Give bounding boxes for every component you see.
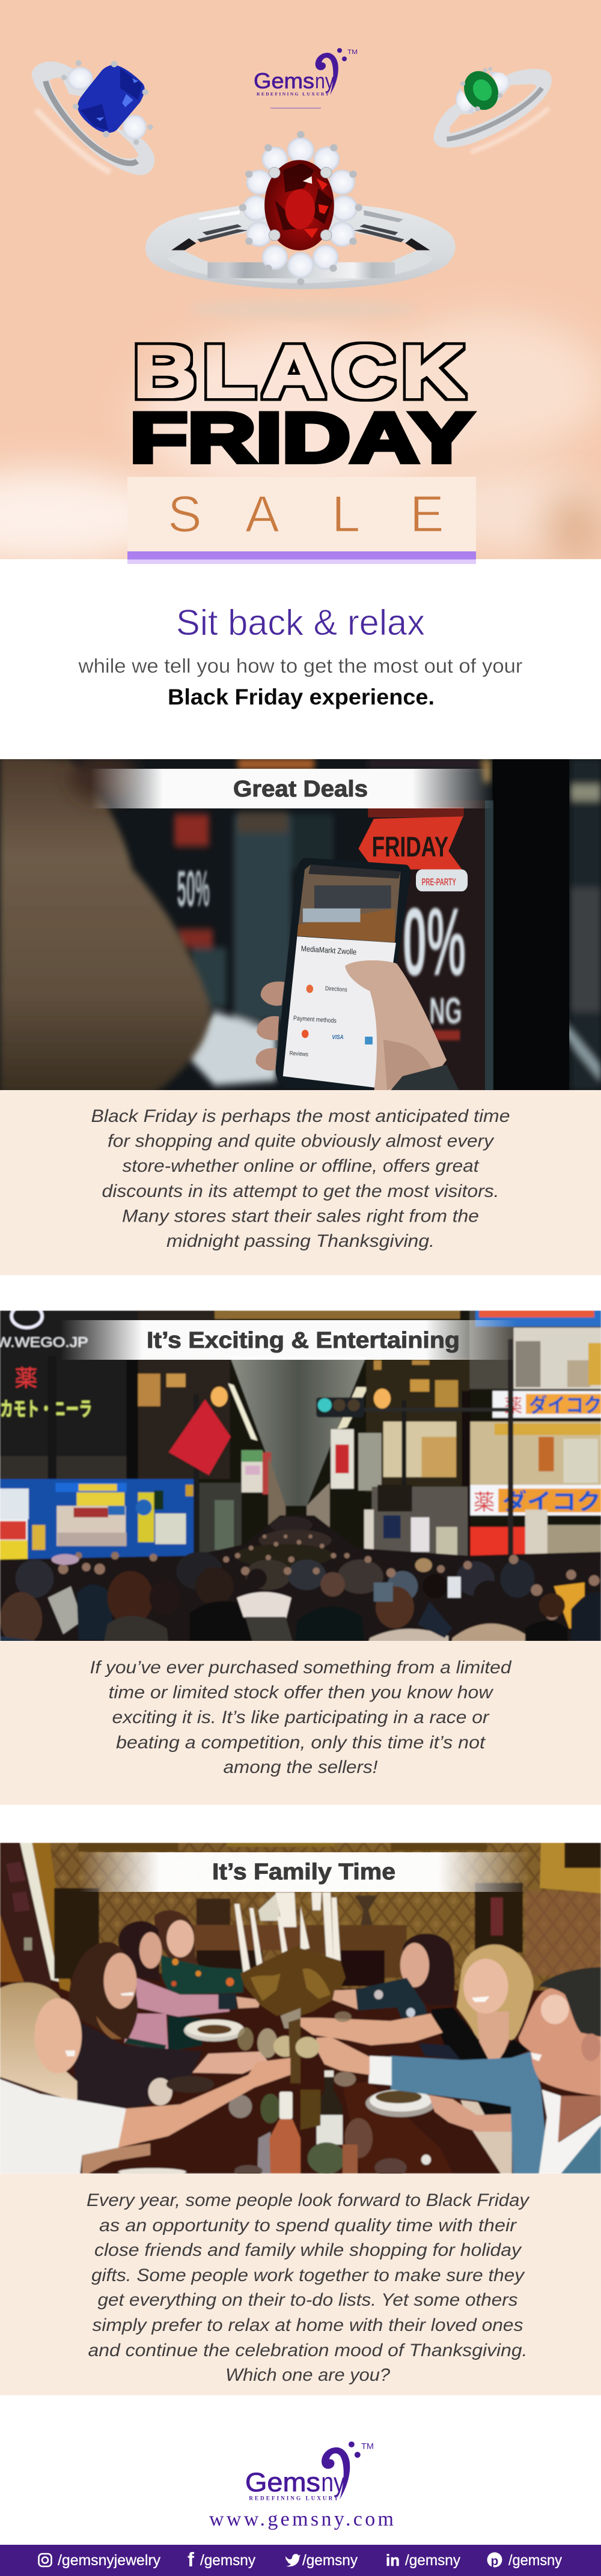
- dark blouse behind: [419, 2043, 461, 2060]
- text panel: great deals: store-whether online or offline, offers great: [123, 1156, 480, 1176]
- photo: shopper with phone: [0, 754, 601, 1094]
- heading banner: exciting: [60, 1320, 517, 1360]
- logo: Gemsny top: ny: [315, 68, 334, 93]
- footer social bar: [0, 2545, 601, 2576]
- woman 4: green floral dress: [154, 1910, 243, 1995]
- text panel: family time: gifts. Some people work together to make sure they: [91, 2265, 525, 2285]
- logo: Gemsny bottom: Gems: [245, 2468, 320, 2497]
- text panel: exciting: exciting it is. It’s like participating in a race or: [112, 1708, 490, 1727]
- sale numerals: 0%: [403, 888, 466, 996]
- facebook handle: /gemsny: [200, 2552, 255, 2569]
- glasses and greenery: [300, 2090, 320, 2130]
- white wine bottle: [317, 2071, 343, 2145]
- photo: shopper with phone: Payment methods: [293, 1015, 337, 1025]
- red friday banner: [358, 816, 463, 869]
- street lamps, poles and signs: [194, 1395, 199, 1567]
- twitter handle: /gemsny: [302, 2552, 358, 2569]
- arcade roof: [230, 1356, 366, 1506]
- icon: linkedin: in: [386, 2551, 400, 2569]
- logo: Gemsny top: TM: [347, 49, 358, 56]
- text panel: great deals: for shopping and quite obviously almost every: [108, 1132, 495, 1151]
- text panel: family time: close friends and family while shopping for holiday: [94, 2240, 522, 2260]
- man with blue cardigan: [316, 1967, 601, 2174]
- heading banner: exciting: It’s Exciting & Entertaining: [147, 1328, 460, 1353]
- text panel: family time: simply prefer to relax at home with their loved ones: [93, 2315, 523, 2335]
- photo: family toast at dinner table: [0, 1843, 601, 2177]
- hero peach background with clouds: [0, 0, 601, 564]
- candelabra: [240, 1944, 302, 2016]
- subheading bold: Black Friday experience.: [168, 685, 435, 709]
- logo: Gemsny top: REDEFINING LUXURY: [257, 91, 329, 97]
- right half of dinner scene: [296, 1843, 601, 2177]
- text panel: exciting: [0, 1641, 601, 1805]
- icon: instagram: [38, 2554, 52, 2566]
- logo: Gemsny top: Gems: [254, 68, 314, 93]
- ruby stone: [264, 160, 334, 250]
- heading banner: great deals: [90, 769, 493, 808]
- photo: shopper with phone: Directions: [325, 985, 347, 993]
- icon: central ruby ring: [145, 131, 456, 289]
- icon: facebook: f: [188, 2548, 195, 2571]
- icon: twitter: [285, 2554, 300, 2566]
- text panel: family time: as an opportunity to spend quality time with their: [99, 2216, 517, 2235]
- instagram handle: /gemsnyjewelry: [58, 2552, 160, 2569]
- heading: sit back and relax: Sit back & relax: [176, 602, 425, 643]
- carved chair: [475, 1883, 523, 1953]
- poster: [377, 801, 485, 1090]
- right store: [469, 1311, 601, 1389]
- pinterest handle: /gemsny: [508, 2552, 562, 2569]
- subheading: while we tell you how to get the most out of your: [78, 655, 523, 677]
- candles: [234, 1893, 296, 1988]
- text panel: family time: [0, 2174, 601, 2395]
- text panel: family time: get everything on their to-do lists. Yet some others: [97, 2290, 518, 2310]
- panel: hero: [0, 0, 601, 564]
- coat sleeve: [391, 1064, 459, 1090]
- photo: crowded shopping street: カモト・ニーラ: [0, 1398, 92, 1420]
- dark store pillar: [493, 759, 569, 1090]
- text panel: great deals: discounts in its attempt to get the most visitors.: [102, 1181, 499, 1201]
- phone screen image: [297, 865, 401, 943]
- linkedin handle: /gemsny: [405, 2552, 460, 2569]
- left half of dinner scene: [0, 1843, 302, 2177]
- woman 3: pink sweater: [118, 1921, 260, 2052]
- plate with food: [365, 2090, 436, 2117]
- sale box: SALE: [168, 486, 444, 543]
- panel: exciting and entertaining: [0, 1305, 601, 1805]
- candelabra: [300, 1948, 346, 2016]
- title: FRIDAY solid: FRIDAY: [130, 398, 473, 477]
- logo: Gemsny bottom: TM: [361, 2441, 374, 2450]
- gold picture frame: [540, 1843, 601, 1893]
- photo: crowded shopping street: [0, 1305, 601, 1646]
- photo: shopper with phone: MediaMarkt Zwolle: [301, 944, 357, 957]
- photo: crowded shopping street: 薬: [14, 1366, 37, 1392]
- title: BLACK outlined: BLACK: [133, 331, 471, 413]
- sale numerals: [177, 861, 466, 1040]
- heading banner: family time: [78, 1852, 529, 1892]
- photo: crowded shopping street: 薬: [504, 1396, 522, 1416]
- logo: Gemsny bottom: ny: [321, 2468, 345, 2497]
- text panel: exciting: If you’ve ever purchased something from a limited: [90, 1658, 512, 1677]
- icon: green emerald ring: [433, 65, 552, 152]
- left dark building: [0, 1311, 138, 1456]
- sale numerals: 50%: [177, 861, 210, 917]
- rose bottle and greenery: [260, 2094, 281, 2123]
- icon: blue sapphire ring: [32, 60, 154, 175]
- text panel: great deals: Many stores start their sales right from the: [122, 1206, 479, 1226]
- website url: www.gemsny.com: [209, 2508, 394, 2530]
- photo: shopper with phone: Reviews: [289, 1050, 309, 1058]
- sale box: [127, 477, 476, 564]
- text panel: family time: and continue the celebration mood of Thanksgiving.: [88, 2341, 528, 2360]
- logo: Gemsny bottom: [245, 2441, 374, 2502]
- logo: Gemsny bottom: REDEFINING LUXURY: [249, 2496, 338, 2502]
- text panel: great deals: [0, 1090, 601, 1275]
- logo underline: [270, 108, 321, 109]
- inner band: [167, 250, 433, 283]
- text panel: exciting: among the sellers!: [224, 1757, 378, 1777]
- phone card: [283, 936, 396, 1088]
- text panel: exciting: time or limited stock offer then you know how: [108, 1683, 494, 1702]
- phone: [276, 858, 410, 1090]
- candles: [300, 1893, 341, 1963]
- intro text block: [78, 602, 523, 709]
- icon: pinterest: [487, 2553, 502, 2568]
- vase: [355, 1896, 377, 1925]
- text panel: exciting: beating a competition, only this time it’s not: [116, 1733, 486, 1753]
- woman 2: dotted blouse: [68, 1942, 269, 2108]
- crowd: [0, 1515, 601, 1644]
- text panel: family time: Which one are you?: [225, 2365, 390, 2385]
- mantel: [192, 1925, 302, 1950]
- photo: shopper with phone: FRIDAY: [372, 831, 448, 863]
- high-backed chair: [54, 1888, 99, 1979]
- shoulder of shopper: [0, 754, 211, 1094]
- diamonds halo: [243, 138, 358, 278]
- sale numerals: NG: [429, 990, 462, 1031]
- brunette woman: [332, 1933, 455, 2020]
- blonde woman: [300, 1945, 534, 2060]
- photo: shopper with phone: PRE-PARTY: [422, 877, 456, 888]
- heading banner: great deals: Great Deals: [233, 777, 368, 802]
- text panel: great deals: midnight passing Thanksgiving.: [166, 1231, 435, 1251]
- mantel: [307, 1925, 407, 1954]
- door and curtains: [0, 1843, 52, 1986]
- text panel: great deals: Black Friday is perhaps the most anticipated time: [91, 1106, 510, 1126]
- icon: pinterest: p: [490, 2554, 498, 2568]
- panel: great deals: [0, 754, 601, 1275]
- heading banner: family time: It’s Family Time: [212, 1859, 395, 1885]
- right building brown: [366, 1359, 469, 1493]
- ring opening: [185, 232, 416, 262]
- ring band: [145, 206, 456, 289]
- text panel: family time: Every year, some people look forward to Black Friday: [87, 2190, 530, 2210]
- hand: [345, 960, 447, 1094]
- lower left blue store: [0, 1479, 194, 1559]
- woman 1: blonde hair, white top: [0, 1983, 290, 2174]
- photo: shopper with phone: VISA: [332, 1034, 344, 1040]
- photo: crowded shopping street: 薬: [474, 1491, 495, 1515]
- logo: Gemsny top: [254, 48, 358, 97]
- panel: family time: [0, 1843, 601, 2395]
- photo: crowded shopping street: ダイコク: [502, 1490, 601, 1515]
- plates, food and glasses: [184, 2019, 245, 2041]
